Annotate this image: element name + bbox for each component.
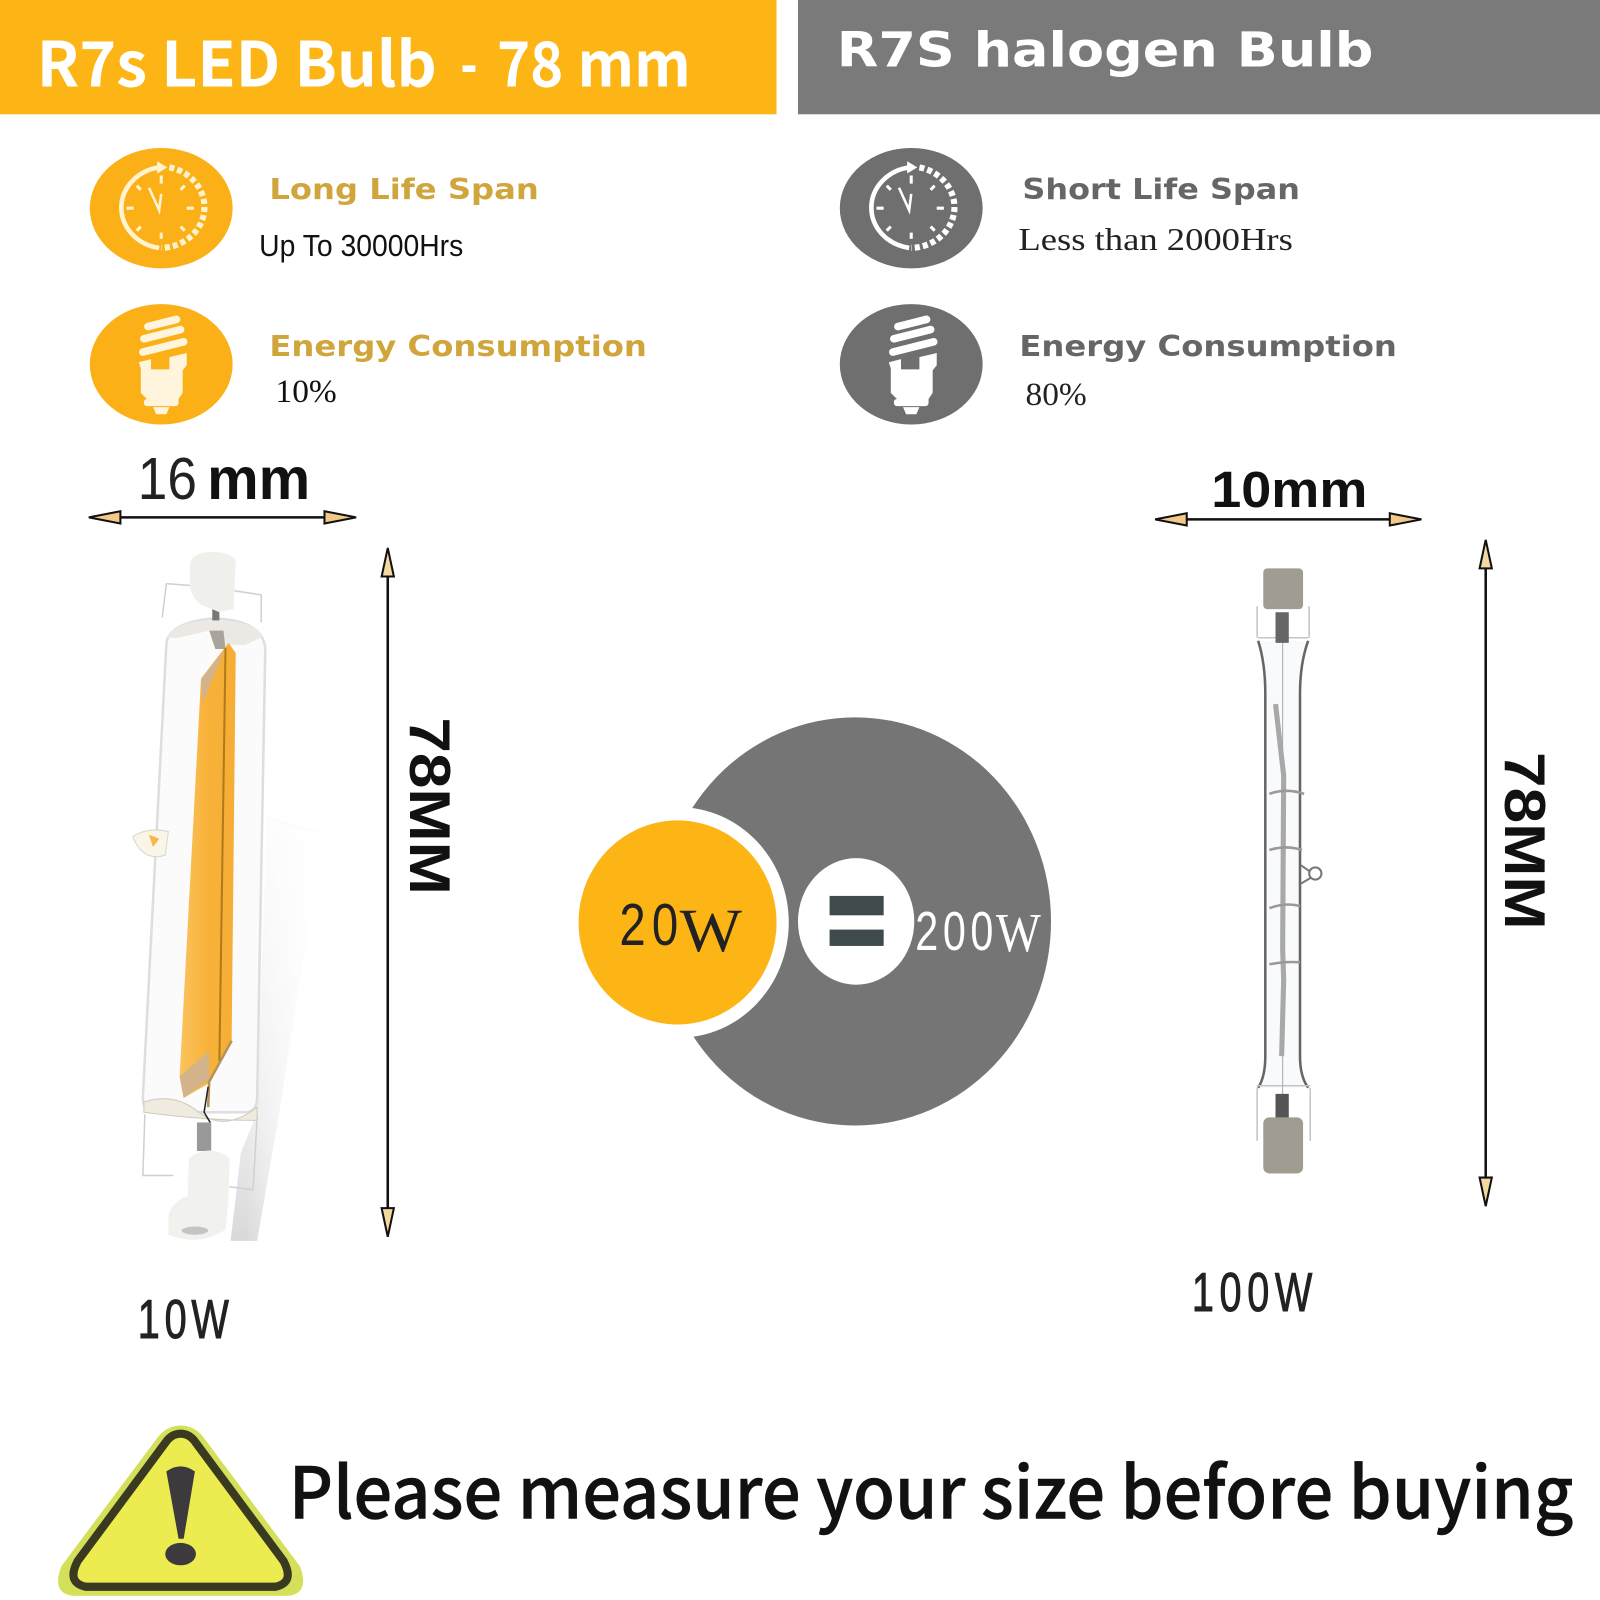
header: LED: 78 [497,15,563,105]
dimension: 10mm: 10mm [1211,461,1367,518]
dimension: 16mm [89,445,356,523]
warning text: Please measure your size before buying [289,1435,1573,1539]
halogen bulb illustration [1257,568,1321,1173]
header: LED: - [460,15,478,105]
LED bulb illustration [133,552,329,1241]
dimension: 16mm: 16 [138,445,197,512]
label: halogen 78MM: 78MM [1492,752,1556,930]
label: 200W: W [996,902,1041,963]
header: LED [0,0,777,114]
heading: long life span: Long Life Span [269,172,539,206]
dimension: LED height arrow [382,548,394,1237]
label: 20W: W [680,897,742,965]
equivalence graphic [568,717,1051,1126]
dimension: halogen height arrow [1480,540,1492,1206]
label: 200W: 200 [915,901,993,962]
text: 80%: 80% [1026,377,1087,413]
icon: halogen bulb [840,304,983,424]
dimension: 16mm: mm [207,445,310,512]
header: halogen: R7S halogen Bulb [837,22,1373,78]
icon: LED clock [90,148,233,268]
text: 10%: 10% [276,374,337,410]
text: up to 30000hrs: Up To 30000Hrs [259,229,463,263]
header: halogen [798,0,1600,114]
text: less than 2000hrs: Less than 2000Hrs [1018,222,1293,257]
header: LED: mm [578,15,691,105]
icon: halogen clock [840,148,983,268]
icon: warning triangle [58,1426,303,1596]
heading: energy consumption LED: Energy Consumption [269,329,647,363]
label: 200W [915,901,1041,963]
header: LED: R7s LED Bulb [37,15,437,105]
equals sign [830,896,884,946]
wattage: 10W: 10W [138,1290,229,1350]
wattage: 100W: 100W [1192,1263,1313,1324]
label: LED 78MM: 78MM [397,717,461,895]
heading: energy consumption halogen: Energy Consumption [1019,329,1397,363]
label: 20W [619,892,742,965]
icon: LED bulb [90,304,233,424]
label: 20W: 20 [619,892,678,958]
dimension: 10mm [1155,461,1421,526]
heading: short life span: Short Life Span [1022,172,1300,206]
